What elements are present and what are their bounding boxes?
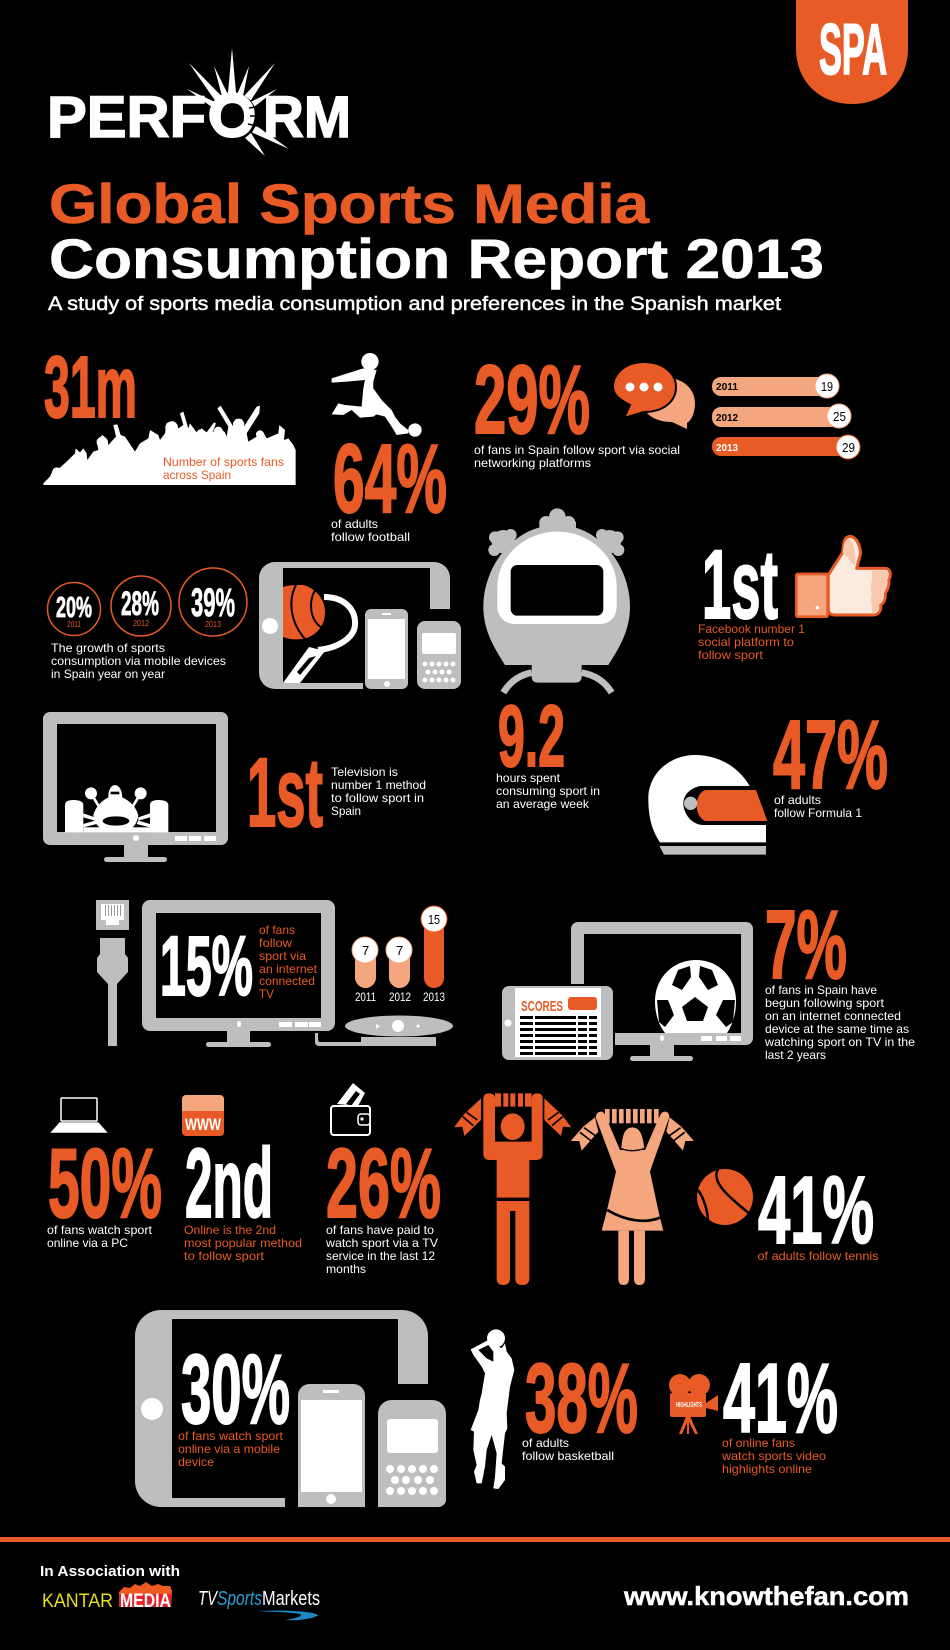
stat: 1st Television: Spain bbox=[331, 804, 361, 818]
icon: video camera: HIGHLIGHTS bbox=[676, 1402, 702, 1409]
stat: 1st Facebook: social platform to bbox=[698, 635, 794, 649]
stat: 7% dual screening: on an internet connected bbox=[765, 1009, 901, 1023]
footer: partners bbox=[40, 1563, 320, 1620]
stat: 26% paid TV: of fans have paid to bbox=[326, 1223, 434, 1237]
stat: 26% paid TV bbox=[325, 1083, 441, 1276]
stat: 7% dual screening: last 2 years bbox=[765, 1048, 826, 1062]
icon: tennis ball bbox=[697, 1169, 753, 1225]
stat: 7% dual screening bbox=[764, 890, 915, 1062]
stat: 50% PC bbox=[47, 1098, 162, 1250]
stat: 47% Formula 1: of adults bbox=[774, 793, 821, 807]
stat: 7% dual screening: of fans in Spain have bbox=[765, 983, 877, 997]
phone bbox=[365, 609, 408, 689]
blackberry bbox=[378, 1400, 446, 1507]
stat: 38% basketball: follow basketball bbox=[522, 1449, 614, 1463]
stat: 1st Facebook: 1st bbox=[702, 530, 778, 639]
chart: social networking by year: 2012 bbox=[716, 413, 738, 424]
stat: 7% dual screening: 7% bbox=[765, 890, 847, 999]
tennis racket bbox=[283, 597, 355, 683]
stat: 7% dual screening: begun following sport bbox=[765, 996, 885, 1010]
stat: 31m sports fans: 31m bbox=[44, 339, 137, 436]
stat: 64% football: follow football bbox=[331, 530, 410, 544]
score table bbox=[520, 1016, 597, 1055]
stat: 1st Television: 1st bbox=[247, 738, 323, 847]
chart: mobile growth circles bbox=[48, 568, 247, 681]
icon: video camera bbox=[669, 1374, 718, 1434]
icon: set-top box bbox=[315, 1016, 453, 1046]
logo: PERFORM: PERF bbox=[47, 85, 206, 150]
logo: PERFORM: O bbox=[209, 85, 256, 150]
stat: 7% dual screening: watching sport on TV in the bbox=[764, 1035, 915, 1049]
chart: internet TV by year bbox=[352, 906, 447, 1004]
title: Consumption Report 2013 bbox=[49, 227, 824, 290]
chart: mobile growth circles: 2011 bbox=[67, 620, 81, 629]
stat: 41% tennis: of adults follow tennis bbox=[758, 1249, 878, 1263]
stat: 30% mobile: online via a mobile bbox=[178, 1442, 280, 1456]
logo: PERFORM: RM bbox=[263, 85, 351, 150]
stat: 15% internet TV: an internet bbox=[259, 962, 318, 976]
stat: 26% paid TV: service in the last 12 bbox=[326, 1249, 435, 1263]
logo: TV Sports Markets: TV bbox=[198, 1588, 218, 1610]
icon: TV with F1 car bbox=[43, 712, 228, 862]
icon: tablet with scores bbox=[502, 986, 613, 1060]
stat: 29% social networking: networking platforms bbox=[474, 456, 591, 470]
stat: 2nd online bbox=[182, 1095, 302, 1263]
stat: 38% basketball: of adults bbox=[522, 1436, 569, 1450]
phone bbox=[298, 1384, 365, 1507]
stat: 9.2 hours: consuming sport in bbox=[496, 784, 600, 798]
football bbox=[655, 960, 736, 1033]
stat: 30% mobile bbox=[178, 1334, 290, 1469]
stat: 26% paid TV: months bbox=[326, 1262, 366, 1276]
stat: 9.2 hours: hours spent bbox=[496, 771, 561, 785]
chart: internet TV by year: 15 bbox=[428, 912, 440, 927]
stat: 47% Formula 1 bbox=[773, 700, 888, 820]
icon: laptop bbox=[52, 1098, 106, 1132]
stat: 15% internet TV: TV bbox=[259, 987, 274, 1001]
stat: 1st Television: number 1 method bbox=[331, 778, 426, 792]
icon: footballer bbox=[332, 353, 422, 437]
title bbox=[49, 172, 824, 290]
icon: speech bubbles bbox=[613, 362, 695, 429]
stat: 2nd online: Online is the 2nd bbox=[184, 1223, 276, 1237]
stat: 15% internet TV: 15% bbox=[160, 919, 253, 1013]
icon: basketball player bbox=[471, 1329, 514, 1489]
stat: 41% video highlights: of online fans bbox=[722, 1436, 795, 1450]
stat: 1st Facebook: follow sport bbox=[698, 648, 764, 662]
chart: mobile growth circles: 20% bbox=[56, 592, 92, 624]
stat: 26% paid TV: watch sport via a TV bbox=[325, 1236, 438, 1250]
chart: internet TV by year: 7 bbox=[362, 943, 369, 958]
chart: mobile growth circles: 2013 bbox=[205, 620, 221, 629]
icon: tablet with scores: SCORES bbox=[521, 998, 563, 1015]
icon: connected TV bbox=[142, 900, 335, 1047]
stat: 1st Television: to follow sport in bbox=[331, 791, 424, 805]
chart: mobile growth circles: 28% bbox=[121, 585, 159, 623]
logo: Kantar Media: KANTAR bbox=[42, 1591, 113, 1612]
chart: social networking by year: 29 bbox=[842, 440, 855, 455]
stat: 1st Facebook: Facebook number 1 bbox=[698, 622, 805, 636]
stat: 15% internet TV: follow bbox=[259, 936, 292, 950]
chart: internet TV by year: 2012 bbox=[389, 990, 411, 1004]
tennis ball bbox=[283, 585, 325, 639]
logo: TV Sports Markets bbox=[198, 1588, 320, 1620]
chart: mobile growth circles: The growth of sports bbox=[51, 641, 165, 655]
stat: 1st Television: Television is bbox=[331, 765, 398, 779]
chart: mobile growth circles: in Spain year on year bbox=[51, 667, 165, 681]
stat: 30% mobile: device bbox=[178, 1455, 214, 1469]
stat: 38% basketball: 38% bbox=[525, 1343, 638, 1453]
stat: 30% mobile: 30% bbox=[181, 1334, 290, 1444]
stat: 64% football: of adults bbox=[331, 517, 378, 531]
stat: 9.2 hours bbox=[496, 688, 600, 811]
footer: website: www.knowthefan.com bbox=[623, 1581, 909, 1611]
icon: www: WWW bbox=[185, 1115, 222, 1134]
stat: 64% football: 64% bbox=[333, 424, 447, 533]
stat: 1st Facebook bbox=[698, 530, 805, 662]
stat: 41% tennis: 41% bbox=[758, 1157, 874, 1264]
chart: mobile growth circles: 2012 bbox=[133, 619, 149, 628]
stat: 31m sports fans: across Spain bbox=[163, 468, 231, 482]
stat: 38% basketball bbox=[522, 1343, 638, 1463]
stat: 50% PC: online via a PC bbox=[47, 1236, 128, 1250]
stat: 31m sports fans bbox=[43, 339, 296, 485]
icon: stopwatch bbox=[483, 508, 630, 693]
chart: social networking by year: 25 bbox=[833, 409, 846, 424]
stat: 9.2 hours: 9.2 bbox=[498, 688, 565, 785]
stat: 31m sports fans: Number of sports fans bbox=[163, 455, 284, 469]
stat: 2nd online: most popular method bbox=[184, 1236, 302, 1250]
chart: social networking by year: 2011 bbox=[716, 382, 738, 393]
stat: 2nd online: 2nd bbox=[185, 1128, 273, 1238]
logo: TV Sports Markets: Markets bbox=[262, 1588, 320, 1610]
chart: mobile growth circles: 39% bbox=[191, 581, 235, 625]
stat: 41% tennis bbox=[697, 1157, 878, 1264]
title: Global Sports Media bbox=[49, 172, 650, 235]
stat: 7% dual screening: device at the same time as bbox=[765, 1022, 909, 1036]
icon: tablet, phone and blackberry with racket bbox=[259, 562, 461, 691]
F1 car bbox=[65, 785, 168, 832]
stat: 41% video highlights: 41% bbox=[723, 1343, 838, 1453]
stat: 47% Formula 1: follow Formula 1 bbox=[774, 806, 862, 820]
stat: 41% video highlights bbox=[721, 1343, 838, 1476]
icon: female fan with scarf bbox=[571, 1109, 694, 1285]
icon: racing helmet bbox=[648, 755, 768, 855]
icon: ethernet and USB cable bbox=[96, 900, 129, 1046]
crowd silhouette bbox=[43, 406, 296, 485]
chart: social networking by year: 19 bbox=[821, 379, 833, 394]
icon: thumbs up bbox=[796, 536, 890, 617]
stat: 26% paid TV: 26% bbox=[326, 1128, 441, 1238]
icon: wallet bbox=[331, 1083, 370, 1135]
chart: internet TV by year: 7 bbox=[396, 943, 403, 958]
chart: social networking by year bbox=[712, 374, 860, 459]
logo: Kantar Media: MEDIA bbox=[120, 1591, 171, 1612]
stat: 50% PC: of fans watch sport bbox=[47, 1223, 153, 1237]
chart: mobile growth circles: consumption via mobile devices bbox=[51, 654, 226, 668]
stat: 9.2 hours: an average week bbox=[496, 797, 590, 811]
stat: 15% internet TV: sport via bbox=[259, 949, 306, 963]
chart: internet TV by year: 2013 bbox=[423, 990, 445, 1004]
blackberry bbox=[417, 621, 461, 689]
chart: internet TV by year: 2011 bbox=[355, 990, 376, 1004]
icon: large tablet, phone and blackberry bbox=[135, 1310, 446, 1509]
stat: 29% social networking: 29% bbox=[474, 345, 590, 454]
icon: monitor with football bbox=[565, 922, 753, 1061]
stat: 41% video highlights: highlights online bbox=[722, 1462, 812, 1476]
logo: Kantar Media bbox=[42, 1582, 172, 1612]
stat: 15% internet TV: connected bbox=[259, 974, 315, 988]
icon: www bbox=[182, 1095, 224, 1136]
chart: social networking by year: 2013 bbox=[716, 443, 738, 454]
logo: PERFORM bbox=[47, 48, 351, 156]
stat: 64% football bbox=[331, 353, 447, 544]
subtitle: A study of sports media consumption and preferences in the Spanish market bbox=[48, 294, 782, 315]
icon: male fan with scarf bbox=[454, 1093, 571, 1285]
footer: partners: In Association with bbox=[40, 1563, 180, 1580]
stat: 50% PC: 50% bbox=[48, 1128, 162, 1238]
stat: 15% internet TV: of fans bbox=[259, 923, 295, 937]
stat: 30% mobile: of fans watch sport bbox=[178, 1429, 284, 1443]
badge: SPA bbox=[796, 0, 908, 104]
stat: 41% video highlights: watch sports video bbox=[721, 1449, 826, 1463]
stat: 2nd online: to follow sport bbox=[184, 1249, 265, 1263]
logo: TV Sports Markets: Sports bbox=[217, 1588, 262, 1610]
stat: 29% social networking: of fans in Spain follow sport via social bbox=[474, 443, 680, 457]
